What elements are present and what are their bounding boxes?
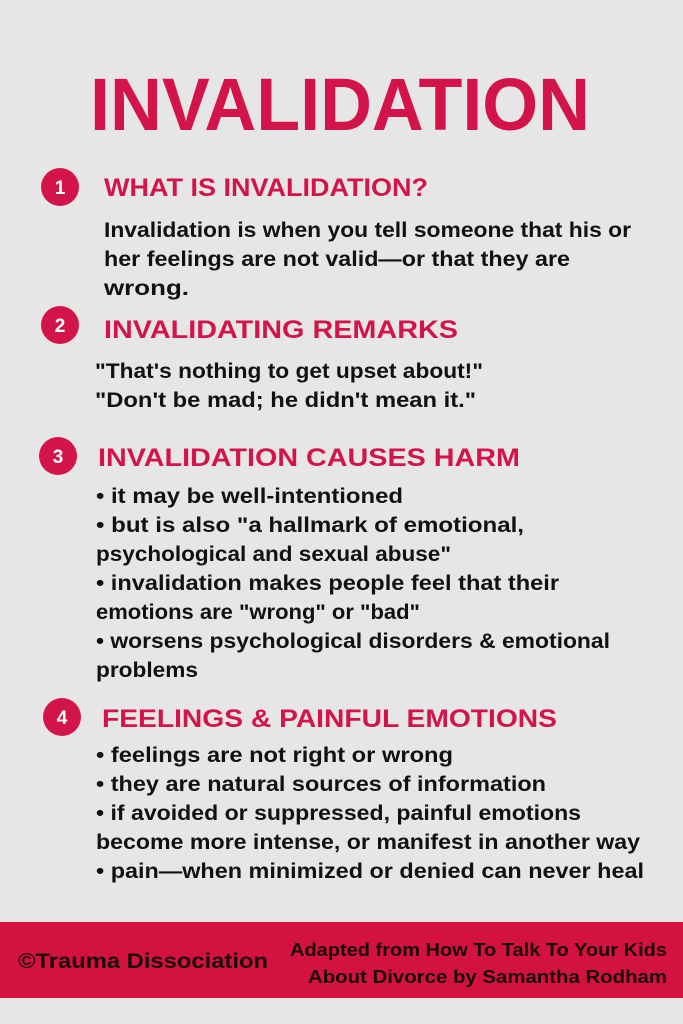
footer: credit: ©Trauma Dissociation [18,950,268,973]
text: definition: Invalidation is when you tell someone that his or [104,219,631,242]
icon: number 2: 2 [55,316,65,337]
text: feelings bullets: become more intense, or manifest in another way [96,831,640,854]
footer band [0,922,683,998]
text: definition: wrong. [103,277,189,300]
text: harm bullets: • invalidation makes people feel that their [96,572,559,595]
icon: number 3: 3 [53,447,63,468]
icon: number 3 [39,437,77,475]
icon: number 2 [41,306,79,344]
text: remarks: "Don't be mad; he didn't mean it." [95,389,476,412]
text: harm bullets: • worsens psychological disorders & emotional [96,630,610,653]
text: remarks [95,360,483,412]
heading 2: INVALIDATING REMARKS [104,316,458,344]
section 2 [41,306,483,412]
text: feelings bullets: • if avoided or suppressed, painful emotions [96,802,581,825]
text: harm bullets: problems [96,659,198,682]
heading 1: WHAT IS INVALIDATION? [104,174,428,202]
text: harm bullets: psychological and sexual abuse" [96,543,451,566]
text: feelings bullets [96,744,644,883]
icon: number 1: 1 [55,178,66,199]
text: feelings bullets: • feelings are not right or wrong [96,744,453,767]
text: definition [103,219,631,300]
section 1 [41,168,631,300]
footer: source: Adapted from How To Talk To Your Kids [290,940,667,960]
text: harm bullets [96,485,610,682]
icon: number 4: 4 [57,708,68,729]
title: INVALIDATION [90,63,590,146]
heading 3: INVALIDATION CAUSES HARM [98,444,520,472]
heading 4: FEELINGS & PAINFUL EMOTIONS [102,705,557,733]
text: harm bullets: • it may be well-intentioned [96,485,403,508]
text: definition: her feelings are not valid—or that they are [104,248,570,271]
section 3 [39,437,610,682]
footer: source: About Divorce by Samantha Rodham [308,967,667,987]
text: harm bullets: • but is also "a hallmark of emotional, [96,514,524,537]
text: harm bullets: emotions are "wrong" or "bad" [96,601,420,624]
footer: source [290,940,667,987]
icon: number 4 [43,698,81,736]
text: remarks: "That's nothing to get upset about!" [95,360,483,383]
text: feelings bullets: • they are natural sources of information [96,773,546,796]
icon: number 1 [41,168,79,206]
section 4 [43,698,644,883]
text: feelings bullets: • pain—when minimized or denied can never heal [96,860,644,883]
